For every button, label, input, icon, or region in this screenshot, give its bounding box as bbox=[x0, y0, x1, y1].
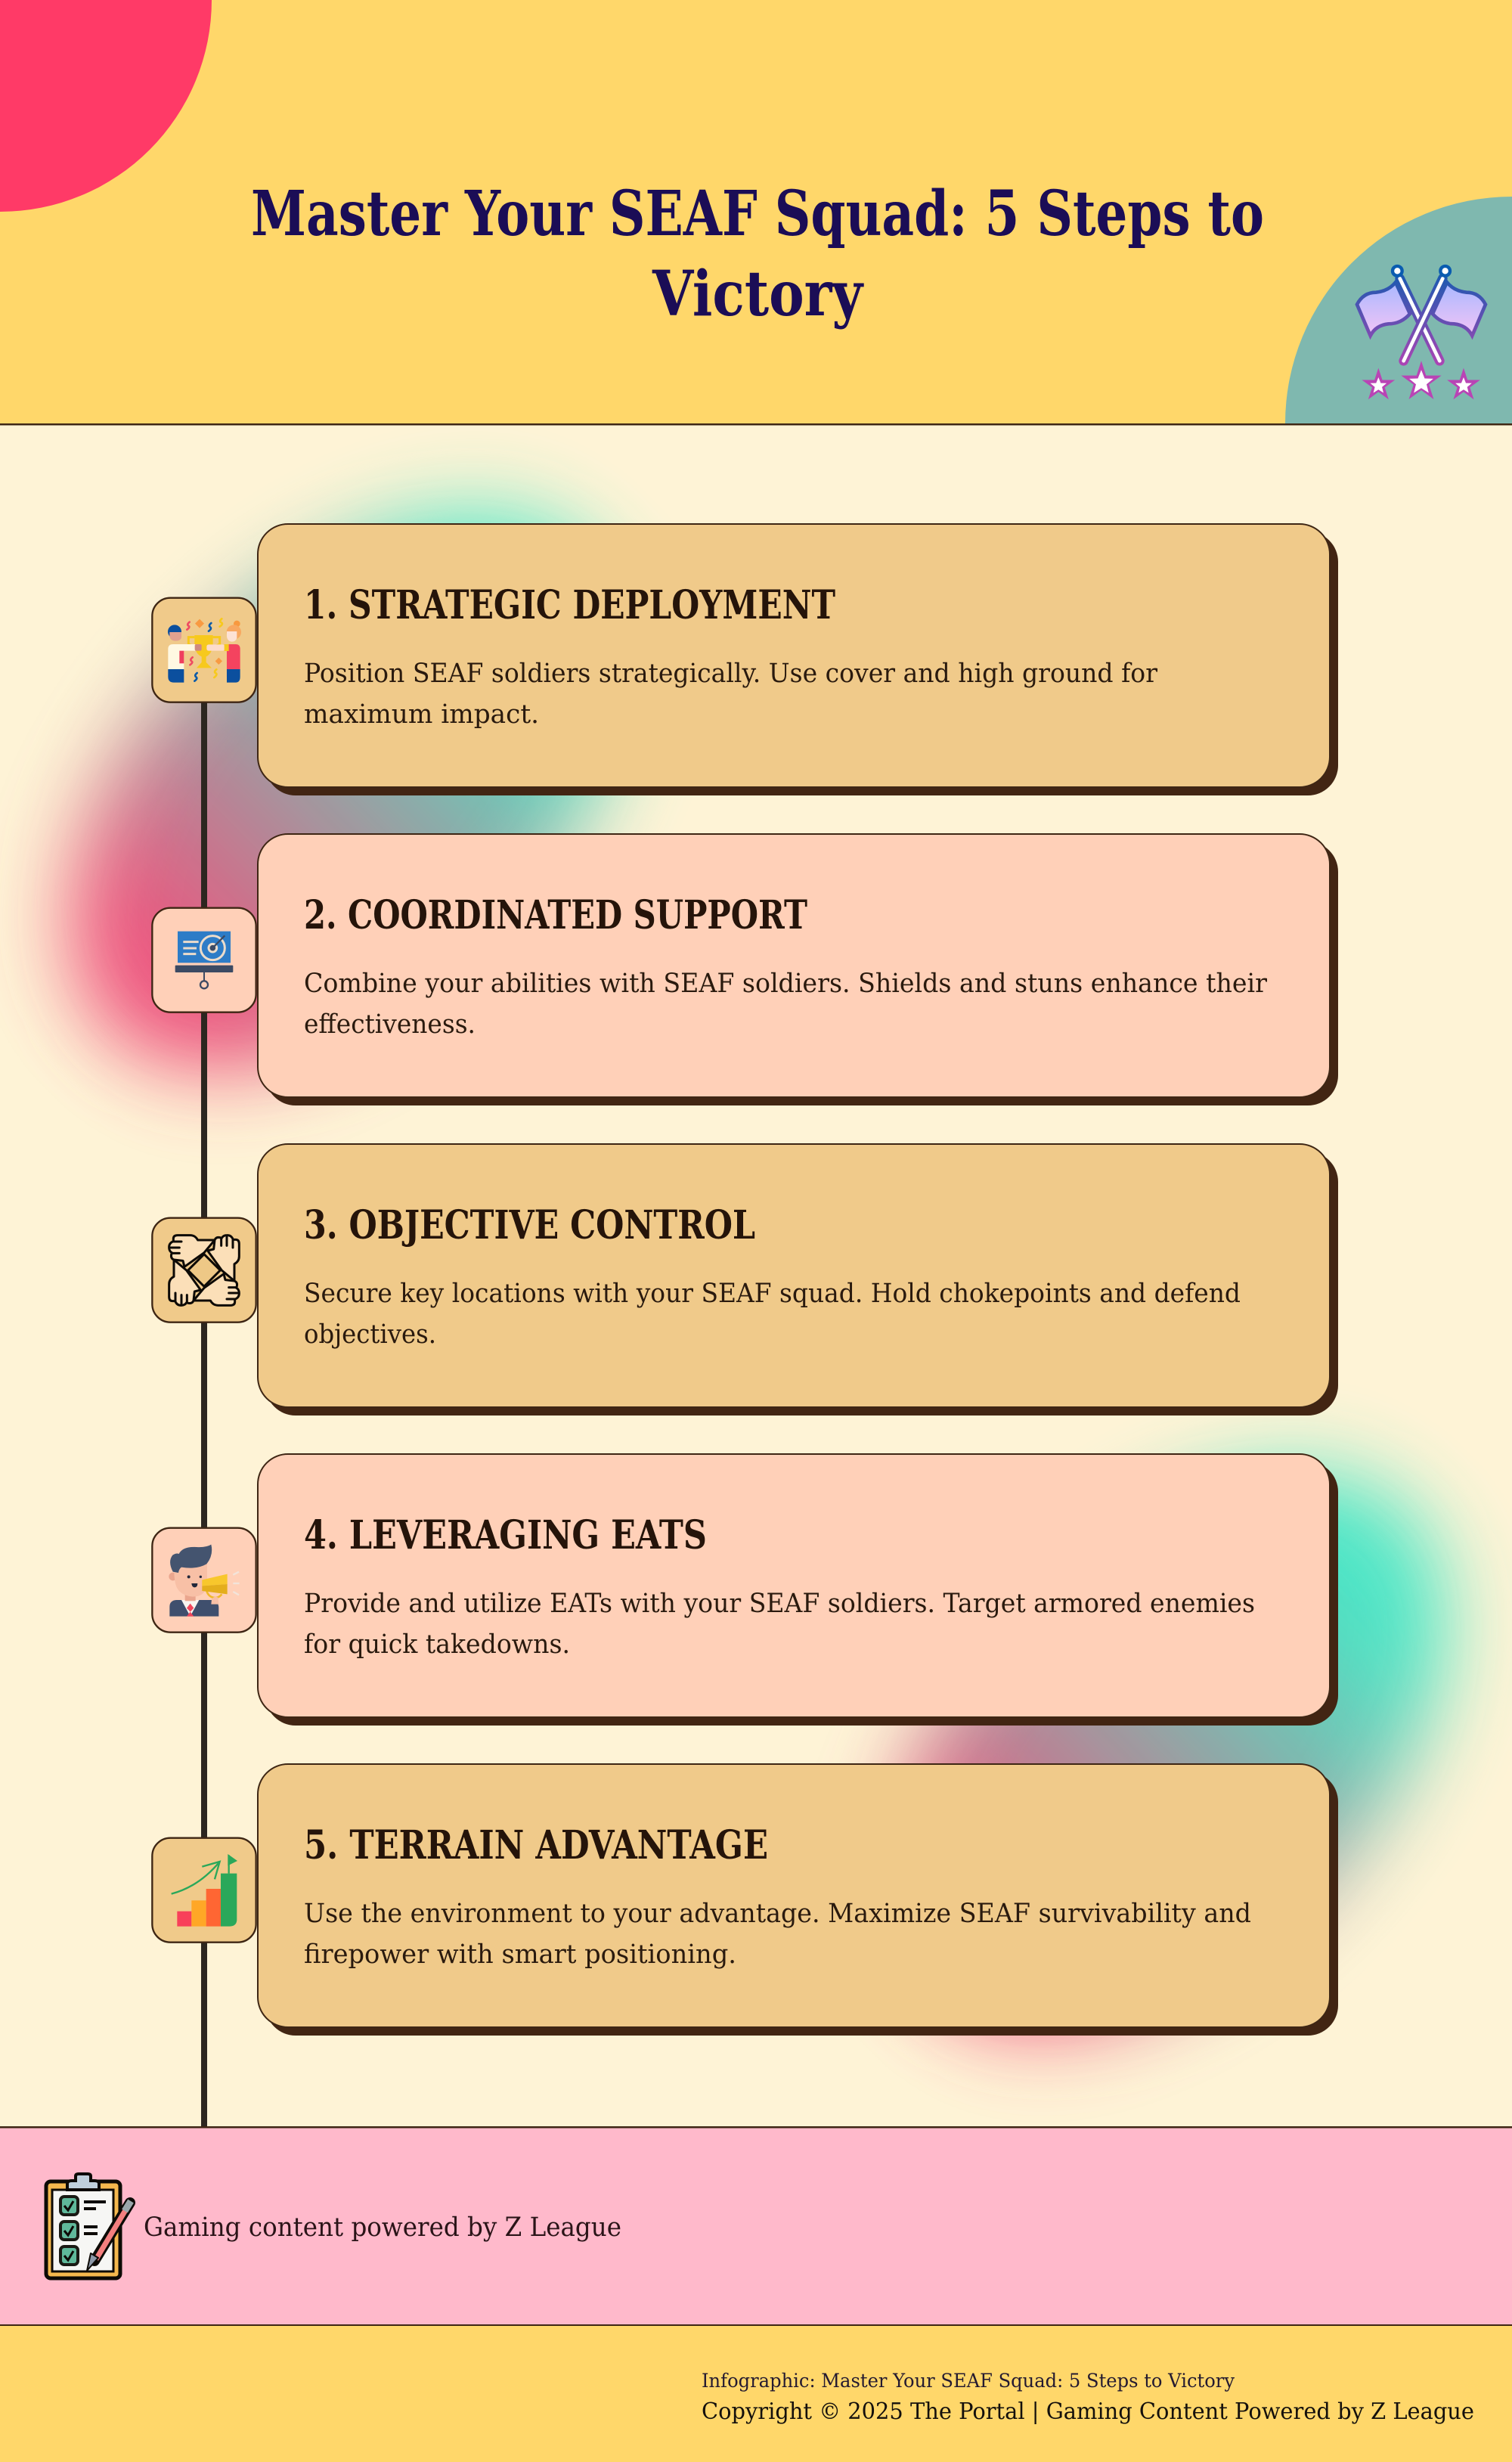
footer band: credits: Infographic: Master Your SEAF Squad: 5 Steps to Victory bbox=[702, 2370, 1235, 2392]
title: Master Your SEAF Squad: 5 Steps to bbox=[251, 178, 1264, 250]
panel: step 2 card: Combine your abilities with SEAF soldiers. Shields and stuns enhance their bbox=[304, 969, 1267, 999]
panel: step 2 card: effectiveness. bbox=[304, 1009, 476, 1040]
footer panel: powered by bbox=[0, 2126, 1512, 2326]
icon: team with trophy bbox=[152, 598, 256, 702]
panel: step 1 card bbox=[258, 524, 1338, 795]
panel: step 5 card: 5. TERRAIN ADVANTAGE bbox=[304, 1822, 768, 1868]
panel: step 3 card: 3. OBJECTIVE CONTROL bbox=[304, 1202, 755, 1248]
panel: step 2 card: 2. COORDINATED SUPPORT bbox=[304, 892, 807, 938]
panel: step 4 card: Provide and utilize EATs with your SEAF soldiers. Target armored enemies bbox=[304, 1589, 1255, 1619]
panel: step 2 card bbox=[258, 834, 1338, 1105]
icon: man with megaphone bbox=[152, 1528, 256, 1633]
panel: step 5 card: firepower with smart positioning. bbox=[304, 1940, 736, 1970]
icon: presentation target bbox=[152, 908, 256, 1012]
timeline line bbox=[201, 650, 207, 2126]
panel: step 1 card: maximum impact. bbox=[304, 699, 539, 730]
icon: clipboard with pencil bbox=[46, 2174, 131, 2278]
panel: step 4 card: for quick takedowns. bbox=[304, 1629, 570, 1660]
footer band: credits: Copyright © 2025 The Portal | Gaming Content Powered by Z League bbox=[702, 2398, 1474, 2425]
panel: step 3 card bbox=[258, 1144, 1338, 1415]
footer band: credits bbox=[0, 2326, 1512, 2462]
panel: step 4 card bbox=[258, 1454, 1338, 1726]
panel: step 3 card: Secure key locations with your SEAF squad. Hold chokepoints and defend bbox=[304, 1279, 1241, 1309]
panel: step 5 card: Use the environment to your advantage. Maximize SEAF survivability and bbox=[304, 1899, 1251, 1929]
panel: step 5 card bbox=[258, 1764, 1338, 2036]
decorative blurred blob: lower right bbox=[850, 1407, 1512, 2090]
panel: step 3 card: objectives. bbox=[304, 1319, 436, 1350]
footer panel: powered by: Gaming content powered by Z League bbox=[144, 2212, 621, 2243]
title: Victory bbox=[652, 258, 864, 330]
icon: four joined hands bbox=[152, 1218, 256, 1322]
panel: step 4 card: 4. LEVERAGING EATS bbox=[304, 1512, 707, 1558]
panel: step 1 card: Position SEAF soldiers strategically. Use cover and high ground for bbox=[304, 659, 1157, 689]
header band bbox=[0, 0, 1512, 425]
panel: step 1 card: 1. STRATEGIC DEPLOYMENT bbox=[304, 582, 835, 628]
title bbox=[251, 178, 1264, 330]
main background bbox=[0, 425, 1512, 2126]
decorative blurred blob: upper left bbox=[8, 447, 662, 1132]
icon: growth bar chart with flag bbox=[152, 1838, 256, 1943]
icon: crossed flags and stars bbox=[1357, 266, 1486, 399]
